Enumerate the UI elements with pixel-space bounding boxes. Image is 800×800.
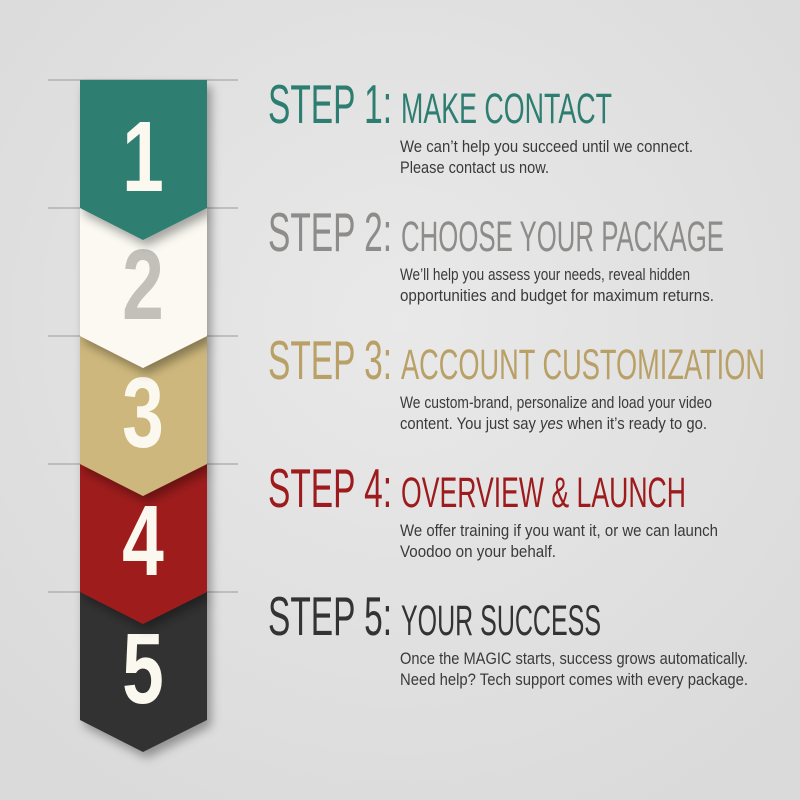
step 5 text [268,585,748,689]
step 2 text: opportunities and budget for maximum returns. [400,286,714,305]
step 4 text: STEP 4: [268,457,392,519]
ribbon segment 2: 2 [122,228,164,340]
ribbon segment 1 [80,80,207,240]
step 5 text: Need help? Tech support comes with every package. [400,670,748,689]
ribbon segment 1: 1 [122,100,164,212]
step 4 text [268,457,718,561]
step 3 text: We custom-brand, personalize and load your video [400,393,712,412]
ribbon segment 5 [80,592,207,752]
step 5 text: Once the MAGIC starts, success grows automatically. [400,649,748,668]
ribbon segment 5: 5 [122,612,164,724]
step 3 text: content. You just say yes when it’s ready to go. [400,414,707,433]
step 2 text: STEP 2: [268,201,392,263]
ribbon [48,80,238,752]
ribbon segment 3 [80,336,207,496]
ribbon segment 4: 4 [122,484,164,596]
step 1 text: STEP 1: [268,73,392,135]
step 3 text [268,329,765,433]
step 4 text: Voodoo on your behalf. [400,542,556,561]
step 2 text: We’ll help you assess your needs, reveal hidden [400,265,690,284]
ribbon segment 2 [80,208,207,368]
ribbon segment 4 [80,464,207,624]
step 5 text: STEP 5: [268,585,392,647]
ribbon segment 3: 3 [122,356,164,468]
step 2 text [268,201,724,305]
step 1 text [268,73,693,177]
step 1 text: Please contact us now. [400,158,549,177]
step 4 text: We offer training if you want it, or we can launch [400,521,718,540]
step 1 text: We can’t help you succeed until we connect. [400,137,693,156]
step 3 text: STEP 3: [268,329,392,391]
step 1 text: MAKE CONTACT [401,85,612,133]
step 5 text: YOUR SUCCESS [401,597,601,645]
